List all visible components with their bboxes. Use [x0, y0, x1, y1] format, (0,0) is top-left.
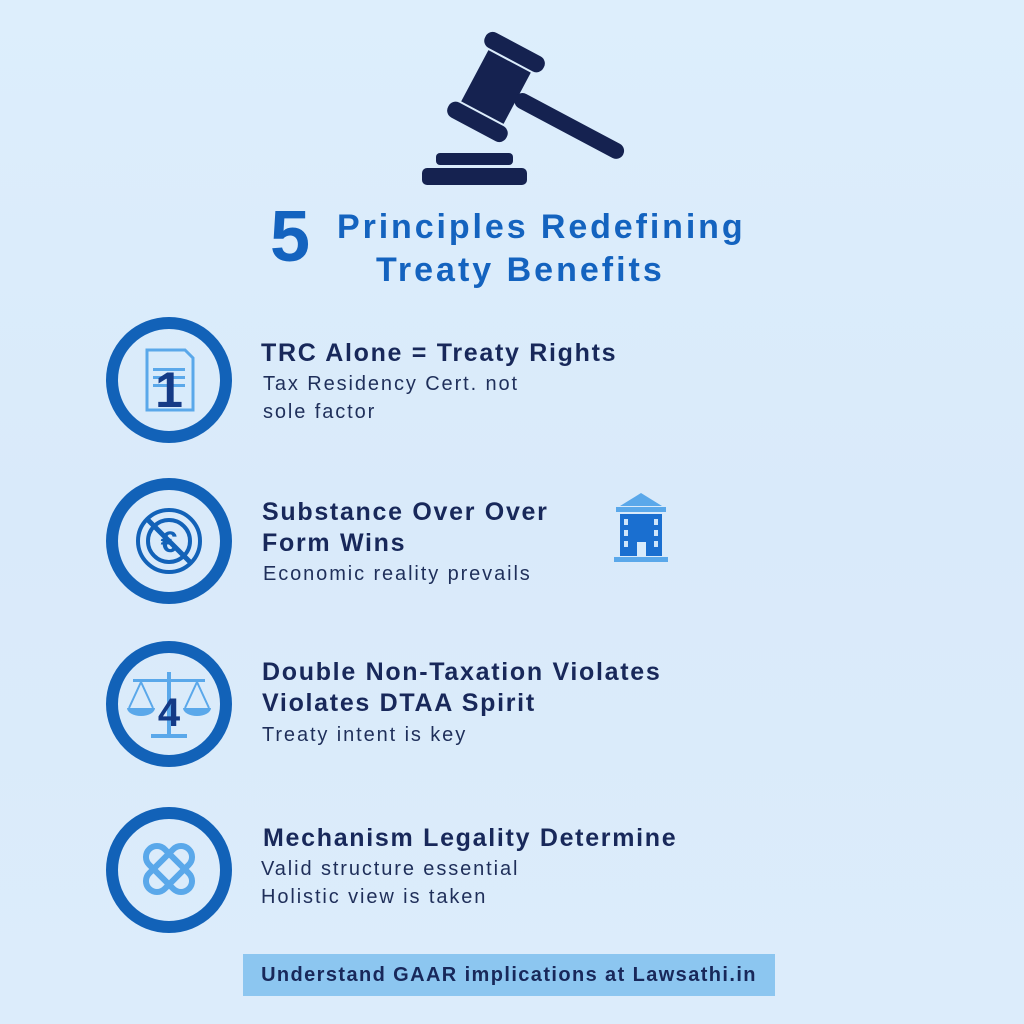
heading 2: Form Wins: [262, 529, 406, 557]
icon: chain links: [106, 807, 232, 933]
callout: footer: [243, 954, 775, 996]
heading 3: Violates DTAA Spirit: [262, 689, 536, 717]
callout: footer: Understand GAAR implications at Lawsathi.in: [261, 964, 757, 986]
icon: no euro: [106, 478, 232, 604]
title: Principles Redefining: [337, 208, 746, 246]
heading 1: TRC Alone = Treaty Rights: [261, 339, 617, 367]
text 1: [263, 373, 519, 423]
text 2: Economic reality prevails: [263, 563, 532, 585]
heading 4: Mechanism Legality Determine: [263, 824, 677, 852]
icon: building: [614, 493, 668, 562]
title: Treaty Benefits: [376, 251, 665, 289]
text 3: Treaty intent is key: [262, 724, 467, 746]
title: [270, 197, 746, 289]
heading 3: Double Non-Taxation Violates: [262, 658, 662, 686]
heading 3: [262, 658, 662, 717]
icon: gavel: [422, 32, 624, 185]
icon: document 1: [106, 317, 232, 443]
text 4: Valid structure essential: [261, 858, 519, 880]
text 1: Tax Residency Cert. not: [263, 373, 519, 395]
icon: scales 4: [106, 641, 232, 767]
text 4: [261, 858, 519, 908]
icon: document 1: 1: [155, 362, 183, 418]
panel: principle 3: [106, 641, 662, 767]
panel: principle 2: [106, 478, 668, 604]
heading 2: [262, 498, 549, 557]
heading 2: Substance Over Over: [262, 498, 549, 526]
icon: no euro: €: [161, 526, 178, 559]
panel: principle 4: [106, 807, 677, 933]
text 1: sole factor: [263, 401, 376, 423]
panel: principle 1: [106, 317, 617, 443]
title: 5: [270, 197, 310, 277]
icon: scales 4: 4: [158, 691, 181, 735]
text 4: Holistic view is taken: [261, 886, 487, 908]
